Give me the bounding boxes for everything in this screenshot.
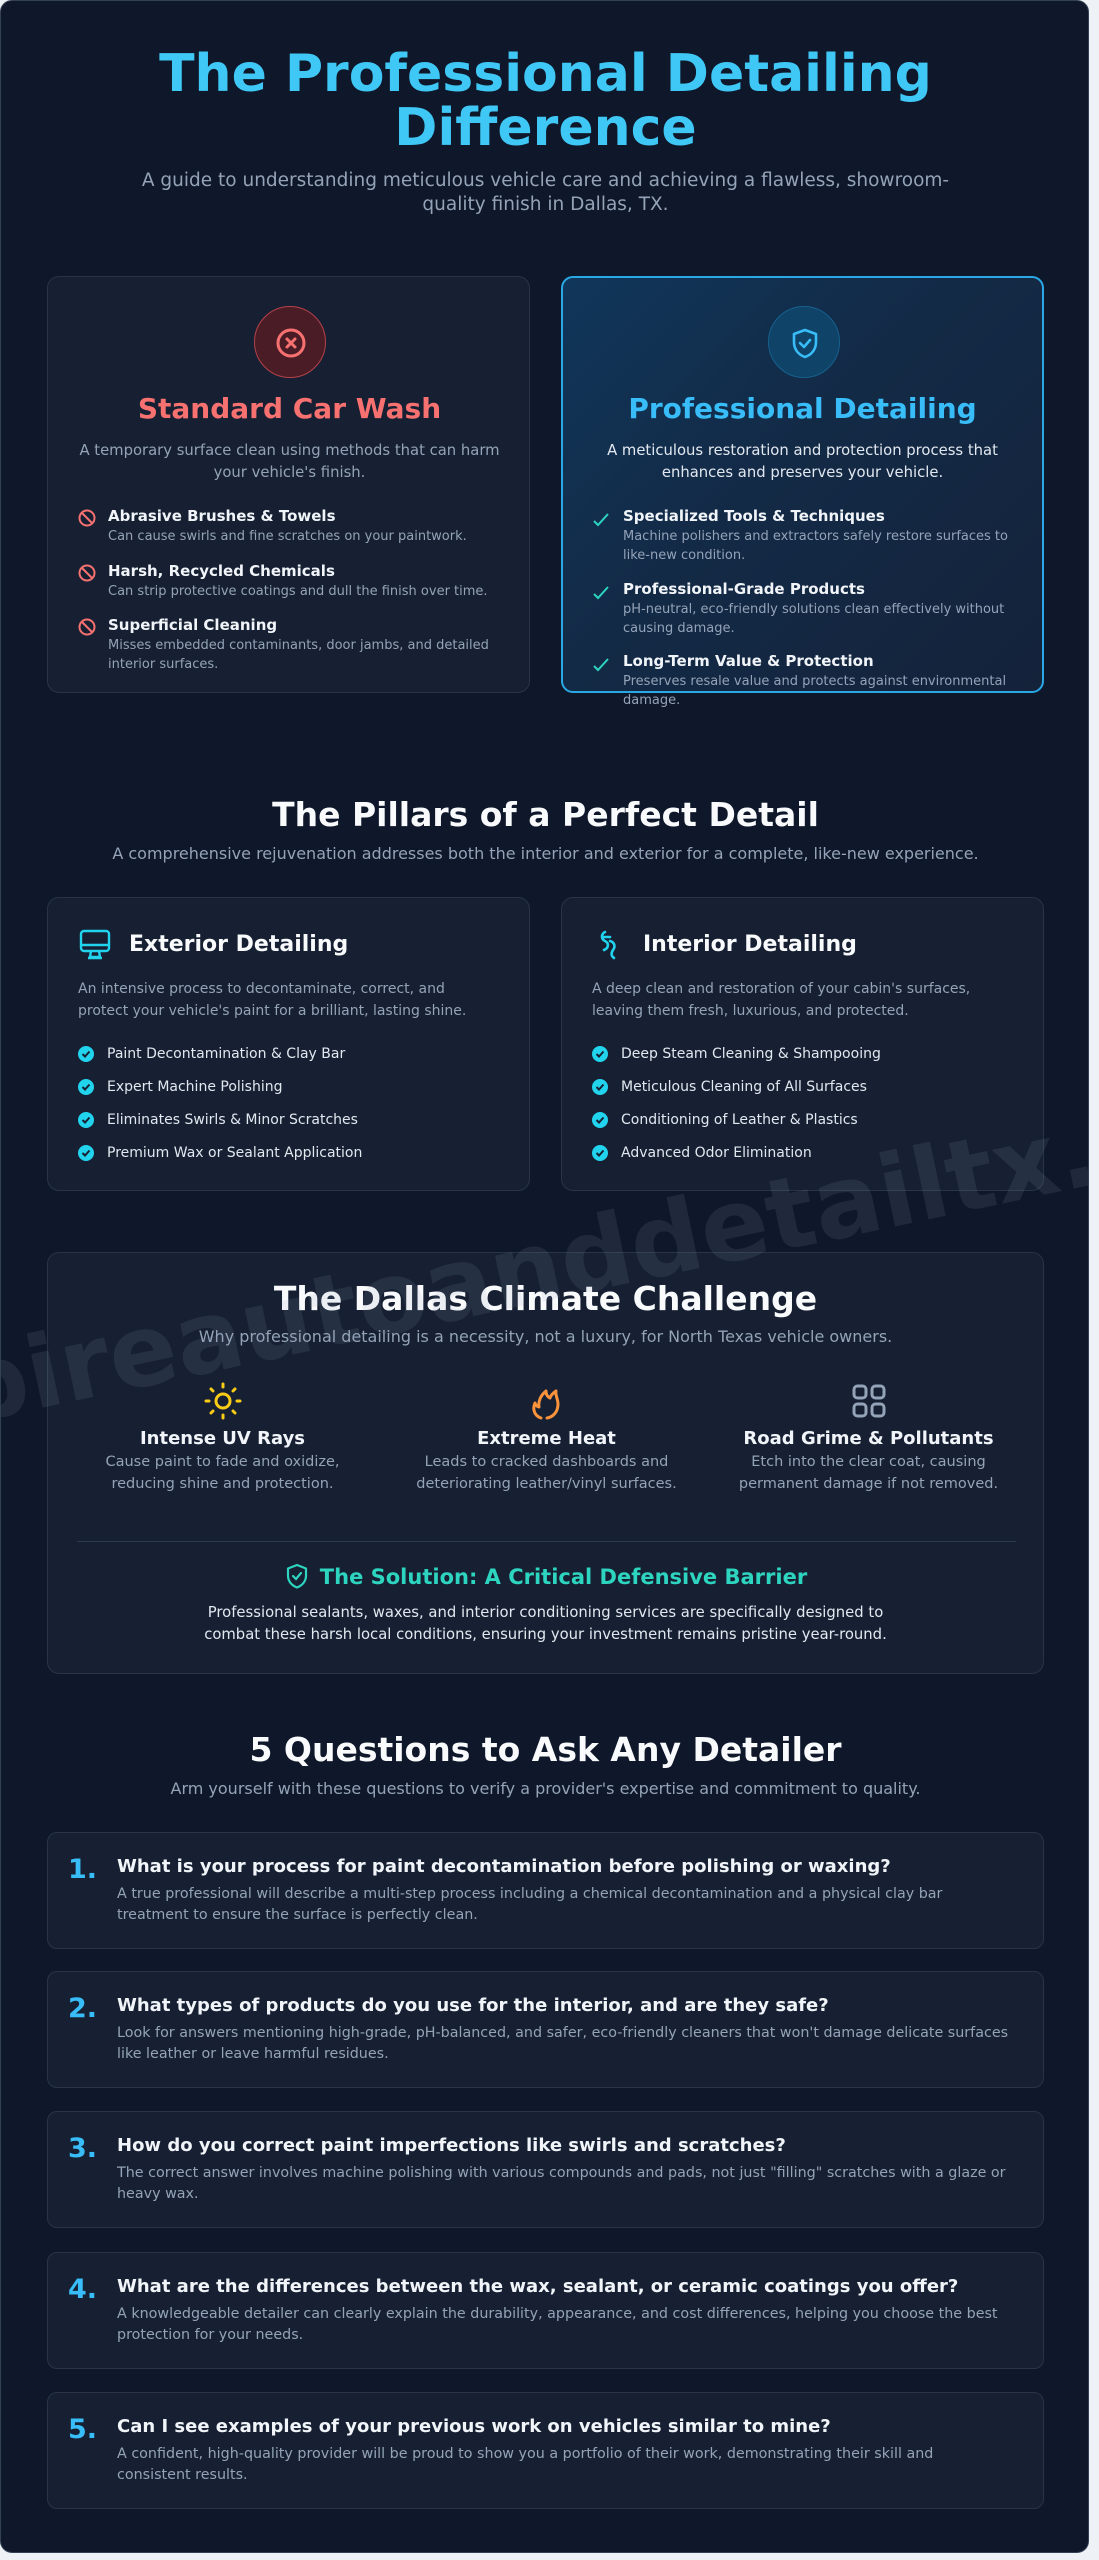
column: uv [105, 1382, 340, 1492]
question 1: What is your process for paint decontamination before polishing or waxing? [117, 1856, 891, 1877]
question 2: What types of products do you use for the interior, and are they safe? [117, 1995, 829, 2016]
heading: Standard Car Wash [138, 392, 441, 425]
question 2: 2. [68, 1993, 97, 2024]
icon: sun [204, 1382, 242, 1420]
icon: x circle [254, 306, 326, 378]
description: A meticulous restoration and protection process that enhances and preserves your vehicle. [607, 442, 998, 481]
question 5: consistent results. [117, 2467, 248, 2483]
subheading: Why professional detailing is a necessity, not a luxury, for North Texas vehicle owners. [199, 1327, 892, 1346]
heading: The Dallas Climate Challenge [274, 1279, 817, 1318]
question 1: A true professional will describe a multi-step process including a chemical decontamination and a physical clay bar [117, 1886, 942, 1902]
title [159, 44, 932, 158]
question 4: What are the differences between the wax, sealant, or ceramic coatings you offer? [117, 2276, 958, 2297]
column: grime: Etch into the clear coat, causing permanent damage if not removed. [739, 1454, 998, 1492]
panel: dallas climate [47, 1252, 1044, 1674]
column: heat: Extreme Heat [477, 1428, 616, 1449]
column: heat [416, 1389, 677, 1492]
list item: superficial: Misses embedded contaminants, door jambs, and detailed interior surfaces. [108, 638, 489, 672]
column: uv: Intense UV Rays [140, 1428, 305, 1449]
list item: superficial: Superficial Cleaning [108, 616, 277, 634]
question 5 [47, 2392, 1044, 2509]
question 5: 5. [68, 2414, 97, 2445]
question 3 [47, 2111, 1044, 2228]
question 3: How do you correct paint imperfections like swirls and scratches? [117, 2135, 786, 2156]
subtitle [142, 170, 949, 215]
icon: fire [532, 1389, 560, 1420]
list item: tools [593, 507, 1008, 563]
question 2: Look for answers mentioning high-grade, pH-balanced, and safer, eco-friendly cleaners that won't damage delicate surfaces like leather or leave harmful residues. [117, 2025, 1008, 2062]
checklist: Paint Decontamination & Clay Bar [107, 1046, 345, 1062]
solution text: Professional sealants, waxes, and interior conditioning services are specifically designed to combat these harsh local conditions, ensuring your investment remains pristine year-round. [204, 1604, 887, 1643]
list item: value: Preserves resale value and protects against environmental damage. [623, 674, 1006, 708]
question 5: Can I see examples of your previous work on vehicles similar to mine? [117, 2416, 831, 2437]
panel: standard car wash [47, 276, 530, 693]
checklist: Expert Machine Polishing [107, 1079, 282, 1095]
description: A temporary surface clean using methods that can harm your vehicle's finish. [79, 442, 500, 481]
list item: superficial [78, 616, 489, 672]
checklist: Conditioning of Leather & Plastics [621, 1112, 858, 1128]
subtitle: A guide to understanding meticulous vehicle care and achieving a flawless, showroom- [142, 170, 949, 191]
question 1: 1. [68, 1854, 97, 1885]
list item: abrasive [78, 507, 467, 544]
title: The Professional Detailing [159, 44, 932, 104]
panel: interior detailing [561, 897, 1044, 1191]
heading: pillars: The Pillars of a Perfect Detail [272, 795, 819, 834]
list item: tools: Specialized Tools & Techniques [623, 507, 885, 525]
question 4: 4. [68, 2274, 97, 2305]
question 4 [47, 2252, 1044, 2369]
description: A deep clean and restoration of your cabin's surfaces, leaving them fresh, luxurious, and protected. [592, 981, 970, 1019]
heading: Exterior Detailing [129, 932, 348, 957]
list item: chemicals: Can strip protective coatings and dull the finish over time. [108, 584, 488, 599]
question 3: The correct answer involves machine polishing with various compounds and pads, not just "filling" scratches with a glaze or heavy wax. [117, 2165, 1006, 2202]
subheading: pillars: A comprehensive rejuvenation addresses both the interior and exterior for a complete, like-new experience. [112, 844, 979, 863]
list item: products: pH-neutral, eco-friendly solutions clean effectively without causing damage. [623, 602, 1004, 636]
checklist: Deep Steam Cleaning & Shampooing [621, 1046, 881, 1062]
column: uv: Cause paint to fade and oxidize, reducing shine and protection. [105, 1454, 340, 1492]
checklist [592, 1046, 881, 1161]
list item: chemicals [78, 562, 488, 599]
heading: Interior Detailing [643, 932, 857, 957]
column: grime: Road Grime & Pollutants [743, 1428, 994, 1449]
solution heading: The Solution: A Critical Defensive Barrier [320, 1565, 807, 1589]
heading: questions: 5 Questions to Ask Any Detailer [249, 1730, 842, 1769]
question 1 [47, 1832, 1044, 1949]
icon: shield [768, 306, 840, 378]
subheading: questions: Arm yourself with these questions to verify a provider's expertise and commitment to quality. [170, 1779, 920, 1798]
list item: value: Long-Term Value & Protection [623, 652, 874, 670]
list item: abrasive: Abrasive Brushes & Towels [108, 507, 336, 525]
icon: spray [600, 930, 616, 960]
question 5: A confident, high-quality provider will be proud to show you a portfolio of their work, demonstrating their skill and [117, 2446, 933, 2462]
icon: grid [852, 1384, 886, 1418]
list item: chemicals: Harsh, Recycled Chemicals [108, 562, 335, 580]
title: Difference [394, 98, 697, 158]
checklist: Premium Wax or Sealant Application [107, 1145, 362, 1161]
checklist: Eliminates Swirls & Minor Scratches [107, 1112, 358, 1128]
list item: products: Professional-Grade Products [623, 580, 865, 598]
checklist [78, 1046, 362, 1161]
subtitle: quality finish in Dallas, TX. [422, 194, 669, 215]
column: heat: Leads to cracked dashboards and deteriorating leather/vinyl surfaces. [416, 1454, 677, 1492]
column: grime [739, 1384, 998, 1492]
question 1: treatment to ensure the surface is perfectly clean. [117, 1907, 478, 1923]
list item: tools: Machine polishers and extractors safely restore surfaces to like-new condition. [623, 529, 1008, 563]
checklist: Meticulous Cleaning of All Surfaces [621, 1079, 867, 1095]
description: An intensive process to decontaminate, correct, and protect your vehicle's paint for a brilliant, lasting shine. [78, 981, 466, 1019]
checklist: Advanced Odor Elimination [621, 1145, 812, 1161]
question 4: A knowledgeable detailer can clearly explain the durability, appearance, and cost differences, helping you choose the best protection for your needs. [117, 2306, 998, 2343]
heading: Professional Detailing [628, 392, 977, 425]
list item: products [593, 580, 1004, 636]
list item: abrasive: Can cause swirls and fine scratches on your paintwork. [108, 529, 467, 544]
icon: monitor [80, 930, 110, 960]
panel: professional detailing [561, 276, 1044, 693]
question 3: 3. [68, 2133, 97, 2164]
panel: exterior detailing [47, 897, 530, 1191]
question 2 [47, 1971, 1044, 2088]
list item: value [593, 652, 1006, 708]
